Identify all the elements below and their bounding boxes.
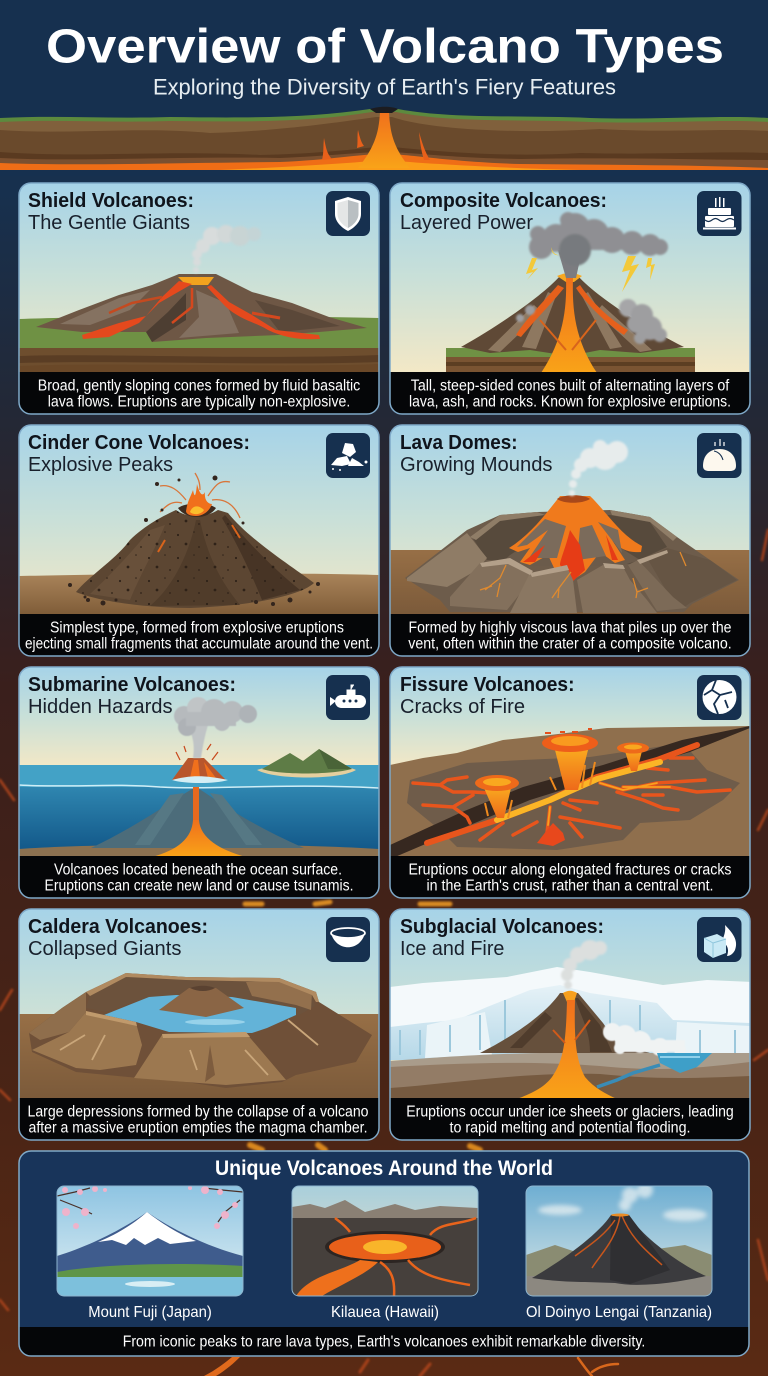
caption: lava flows. Eruptions are typically non-explosive. [48,394,350,410]
heading: Collapsed Giants [28,938,181,960]
lava network [413,745,730,843]
caption: Eruptions occur under ice sheets or glaciers, leading [406,1104,734,1120]
panel: composite volcanoes [390,183,750,414]
photo: Ol Doinyo Lengai [526,1182,712,1296]
ground [19,573,379,615]
caption: Formed by highly viscous lava that piles up over the [408,620,732,636]
heading: Shield Volcanoes: [28,190,194,212]
panel: fissure volcanoes [390,667,752,898]
icon: dome [697,433,742,478]
heading [400,432,552,476]
icon: bowl [326,917,370,962]
caption: Volcanoes located beneath the ocean surface. [54,862,342,878]
heading: Subglacial Volcanoes: [400,916,604,938]
caption: in the Earth's crust, rather than a central vent. [426,878,714,894]
heading [400,674,574,718]
icon: ice and flame [697,917,742,962]
subtitle: Exploring the Diversity of Earth's Fiery Features [153,74,616,100]
ground [19,317,379,374]
scorched zone [407,743,740,850]
section heading: Unique Volcanoes Around the World [215,1157,553,1180]
heading: Cinder Cone Volcanoes: [28,432,250,454]
heading [400,190,607,234]
footer caption: From iconic peaks to rare lava types, Earth's volcanoes exhibit remarkable diversity. [123,1334,645,1350]
photo: Mount Fuji [57,1186,243,1297]
label: Mount Fuji: Mount Fuji (Japan) [88,1304,212,1321]
caption: Tall, steep-sided cones built of alternating layers of [411,378,730,394]
caption: Eruptions occur along elongated fractures or cracks [408,862,732,878]
smoke cloud [174,697,257,758]
heading: Growing Mounds [400,454,552,476]
panel: caldera volcanoes [19,909,379,1140]
header band [0,0,768,176]
heading: Ice and Fire [400,938,504,960]
illustration: volcano and lava [480,991,650,1099]
panel: lava domes [390,425,750,656]
panel: cinder cone volcanoes [19,425,379,656]
caption [19,372,379,414]
icon: submarine [326,675,370,720]
meltwater pool [597,1053,712,1087]
label: Kilauea: Kilauea (Hawaii) [331,1304,439,1321]
illustration: caldera [29,973,372,1088]
ground [390,726,752,857]
title: Overview of Volcano Types [46,20,724,74]
ground [390,1053,750,1099]
lava bombs and arcs [68,473,320,606]
caption [19,856,379,898]
caption: lava, ash, and rocks. Known for explosive eruptions. [409,394,731,410]
decorative cross-section strip [0,107,768,170]
caption: Large depressions formed by the collapse of a volcano [28,1104,368,1120]
steam clouds [561,940,686,1056]
heading: Composite Volcanoes: [400,190,607,212]
steam plume [569,440,628,496]
caption: ejecting small fragments that accumulate around the vent. [25,636,373,652]
island [257,749,356,778]
ground [19,1014,379,1099]
heading: Cracks of Fire [400,696,525,718]
heading: Caldera Volcanoes: [28,916,208,938]
panel: subglacial volcanoes [390,909,752,1140]
caption [390,372,750,414]
smoke plume [192,225,261,273]
caption [19,1098,379,1140]
footer caption [19,1327,749,1356]
caption: to rapid melting and potential flooding. [450,1120,690,1136]
heading: Hidden Hazards [28,696,173,718]
icon: shield [326,191,370,236]
caption: Simplest type, formed from explosive eruptions [50,620,344,636]
heading [400,916,604,960]
caption [390,614,750,656]
lava fountains [475,729,649,818]
illustration: volcano above and below water [91,758,304,857]
sparks [176,744,218,760]
sea [19,765,379,857]
heading: The Gentle Giants [28,212,190,234]
panel: submarine volcanoes [19,667,379,898]
label: Ol Doinyo Lengai: Ol Doinyo Lengai (Tanzania) [526,1304,712,1321]
caption [390,856,750,898]
caption [390,1098,750,1140]
panel: shield volcanoes [19,183,379,414]
heading: Submarine Volcanoes: [28,674,236,696]
heading: Fissure Volcanoes: [400,674,574,696]
heading [28,432,250,476]
ash cloud [516,212,668,344]
illustration: shield volcano [36,274,367,342]
ground [390,550,750,615]
lava blob [537,823,565,846]
heading: Layered Power [400,212,533,234]
icon: rock pile [326,433,370,478]
lightning [526,247,655,292]
dark fissure crack [390,726,750,857]
heading: Lava Domes: [400,432,518,454]
heading [28,190,194,234]
illustration: cinder cone [76,484,314,608]
illustration: lava dome [405,495,739,613]
illustration: composite volcano block [446,273,695,373]
heading [28,674,236,718]
caption: Broad, gently sloping cones formed by fluid basaltic [38,378,360,394]
icon: cracked globe [697,675,742,720]
caption: after a massive eruption empties the magma chamber. [28,1120,368,1136]
photo: Kilauea [292,1186,478,1296]
panel: unique volcanoes around the world [19,1151,749,1356]
heading: Explosive Peaks [28,454,173,476]
glacier [390,967,752,1060]
caption: vent, often within the crater of a composite volcano. [408,636,732,652]
icon: layered cake [697,191,742,236]
caption [19,614,379,656]
caption: Eruptions can create new land or cause tsunamis. [44,878,354,894]
heading [28,916,208,960]
